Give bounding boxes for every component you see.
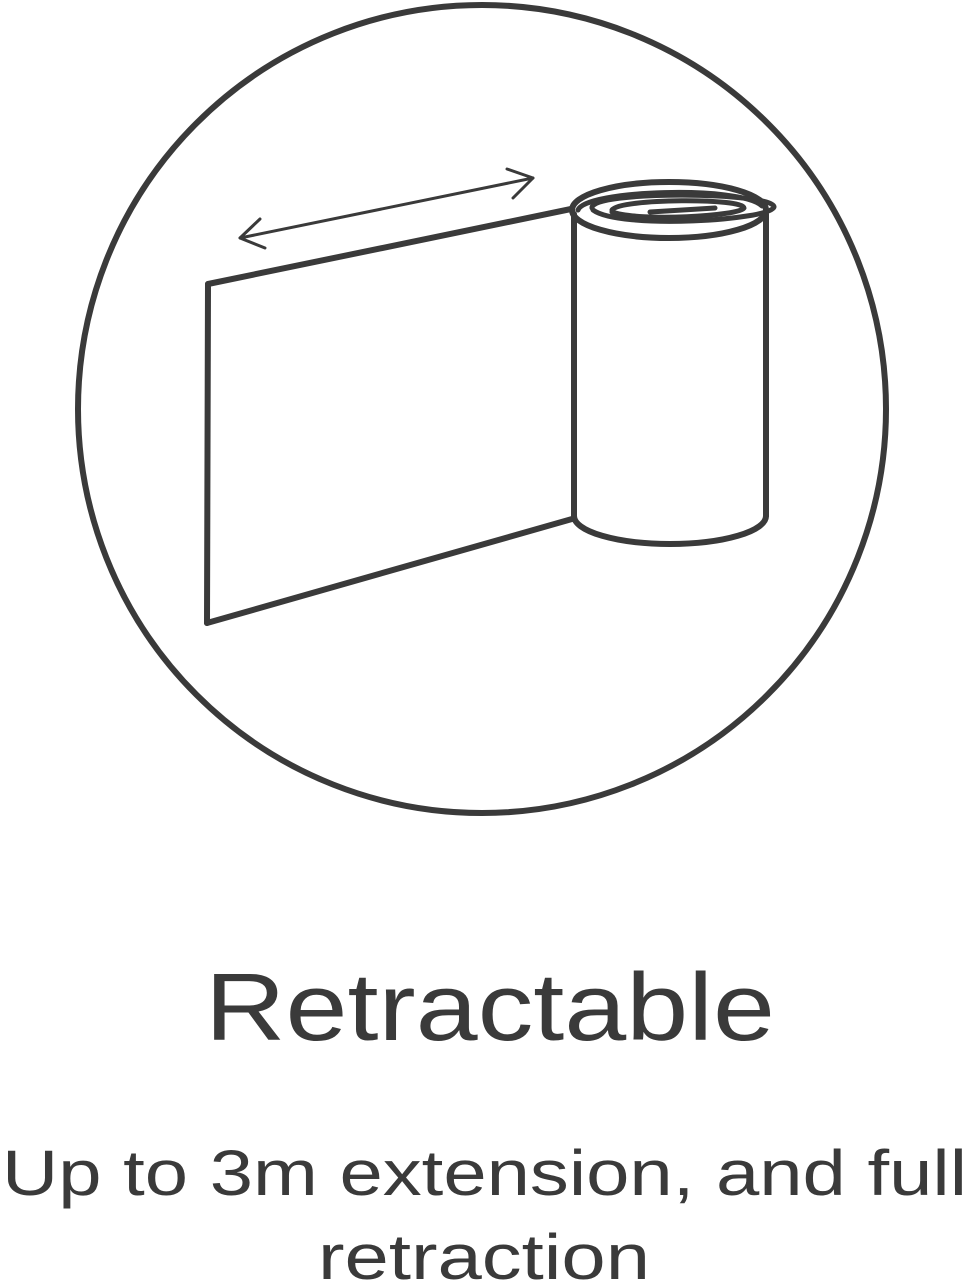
description (2, 1137, 967, 1282)
arrow: extension (240, 169, 533, 248)
sheet (207, 209, 572, 623)
title: Retractable (205, 954, 775, 1061)
icon: circle frame (78, 5, 886, 813)
description: Up to 3m extension, and full (2, 1137, 967, 1209)
spiral (578, 192, 774, 221)
icon: retractable roll (207, 169, 774, 623)
roll cylinder (572, 182, 766, 544)
